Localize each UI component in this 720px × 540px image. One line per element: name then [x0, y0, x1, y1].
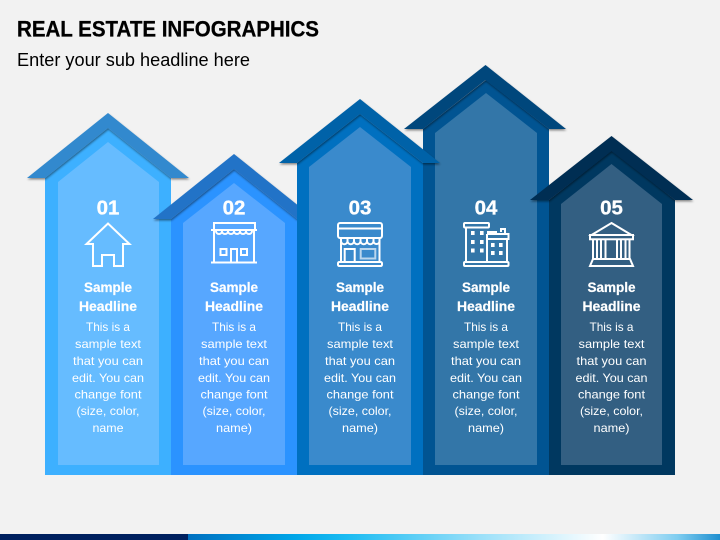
- number 05: 05: [600, 196, 623, 220]
- body text 02: name): [216, 421, 252, 435]
- body text 04: edit. You can: [450, 371, 522, 385]
- headline 02: Headline: [205, 299, 263, 314]
- body text 02: This is a: [212, 320, 256, 334]
- number 04: 04: [475, 196, 498, 220]
- column 05 inner panel: [561, 164, 662, 465]
- column 01 content: [72, 196, 144, 435]
- body text 02: that you can: [199, 354, 269, 368]
- body text 04: This is a: [464, 320, 508, 334]
- icon: storefront: [338, 223, 382, 266]
- body text 05: (size, color,: [580, 404, 643, 418]
- column 03 inner panel: [309, 127, 411, 465]
- icon: buildings: [464, 223, 508, 266]
- body text 04: (size, color,: [455, 404, 517, 418]
- body text 02: sample text: [201, 337, 268, 351]
- body text 05: sample text: [578, 337, 645, 351]
- column 03 body: [297, 114, 423, 475]
- number 02: 02: [223, 196, 245, 220]
- column 02 body: [171, 169, 297, 475]
- column 02 inner panel: [183, 183, 285, 465]
- headline 01: Headline: [79, 299, 137, 314]
- body text 03: edit. You can: [324, 371, 396, 385]
- body text 03: [324, 320, 396, 435]
- body text 04: change font: [452, 388, 520, 402]
- column 02 content: [198, 196, 270, 435]
- body text 01: that you can: [73, 354, 143, 368]
- footer bar: [0, 534, 720, 540]
- body text 05: that you can: [576, 354, 646, 368]
- body text 01: (size, color,: [77, 404, 139, 418]
- headline 05: Headline: [582, 299, 641, 314]
- body text 05: edit. You can: [576, 371, 648, 385]
- column 03 roof: [279, 99, 440, 163]
- column 01 body: [45, 128, 171, 475]
- headline 03: Headline: [331, 299, 389, 314]
- body text 01: [72, 320, 144, 435]
- number 01: 01: [97, 196, 119, 220]
- body text 02: change font: [200, 388, 268, 402]
- body text 03: This is a: [338, 320, 382, 334]
- title: REAL ESTATE INFOGRAPHICS: [17, 16, 319, 42]
- body text 05: change font: [578, 388, 646, 402]
- number 03: 03: [349, 196, 371, 220]
- body text 04: that you can: [451, 354, 521, 368]
- body text 03: (size, color,: [329, 404, 391, 418]
- body text 02: edit. You can: [198, 371, 270, 385]
- body text 05: [576, 320, 648, 435]
- body text 03: name): [342, 421, 378, 435]
- column 04 roof: [404, 65, 566, 129]
- icon: house: [86, 224, 130, 266]
- column 01 inner panel: [58, 142, 159, 465]
- panel: column 04: [404, 65, 566, 475]
- headline 01: Sample: [84, 280, 132, 295]
- body text 01: sample text: [75, 337, 142, 351]
- body text 04: sample text: [453, 337, 520, 351]
- headline 02: Sample: [210, 280, 258, 295]
- body text 03: sample text: [327, 337, 394, 351]
- headline 05: Sample: [588, 280, 636, 295]
- headline 04: Headline: [457, 299, 515, 314]
- column 04 inner panel: [435, 93, 537, 465]
- body text 01: change font: [74, 388, 142, 402]
- column 04 content: [450, 196, 522, 435]
- body text 02: (size, color,: [203, 404, 265, 418]
- column 04 body: [423, 80, 549, 475]
- body text 01: name: [92, 421, 124, 435]
- body text 04: name): [468, 421, 504, 435]
- sub headline: Enter your sub headline here: [17, 50, 250, 70]
- body text 05: name): [594, 421, 630, 435]
- icon: bank: [590, 223, 633, 266]
- body text 03: that you can: [325, 354, 395, 368]
- column 05 roof: [530, 136, 693, 200]
- column 01 roof: [27, 113, 189, 178]
- column 05 body: [549, 150, 675, 475]
- panel: column 01: [27, 113, 189, 475]
- body text 03: change font: [326, 388, 394, 402]
- panel: column 03: [279, 99, 440, 475]
- body text 05: This is a: [590, 320, 634, 334]
- body text 02: [198, 320, 270, 435]
- body text 01: This is a: [86, 320, 130, 334]
- headline 03: Sample: [336, 280, 384, 295]
- panel: column 02: [153, 154, 315, 475]
- headline 04: Sample: [462, 280, 510, 295]
- icon: shop: [211, 223, 257, 262]
- column 03 content: [324, 196, 396, 435]
- column 05 content: [576, 196, 648, 435]
- column 02 roof: [153, 154, 315, 219]
- panel: column 05: [530, 136, 693, 475]
- body text 01: edit. You can: [72, 371, 144, 385]
- body text 04: [450, 320, 522, 435]
